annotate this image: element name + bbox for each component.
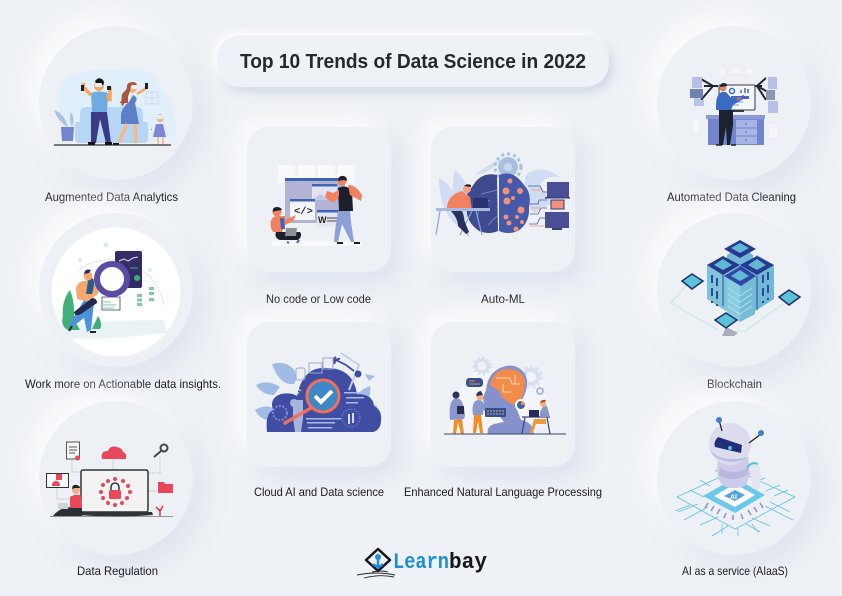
logo: Learnbay [356,548,487,578]
white inner disc [52,228,180,356]
illustration: people building low-code pages [271,165,362,246]
illustration: analyst at data desk [690,68,778,145]
panel: Actionable data insights [25,192,221,391]
logo wordmark: Learn [393,550,449,575]
panel: Augmented Data Analytics [35,21,202,204]
panel: Enhanced Natural Language Processing [404,296,602,499]
panel: Data Regulation [35,380,202,578]
panel: No code or Low code [242,122,402,306]
illustration: head with brain and team [444,358,566,434]
illustration: man with magnifier and dashboard [59,242,167,339]
illustration: laptop with GDPR lock [46,442,173,516]
label: Data Regulation [77,564,158,578]
panel: Automated Data Cleaning [653,21,820,204]
circle [39,401,193,555]
card [247,322,391,467]
card [431,127,575,272]
panel: Cloud AI and Data science [242,296,402,499]
label: Enhanced Natural Language Processing [404,485,602,499]
title text: Top 10 Trends of Data Science in 2022 [240,50,586,73]
label: Cloud AI and Data science [254,485,384,499]
illustration: family with VR headsets [54,68,176,145]
logo wordmark: bay [449,550,487,575]
card [247,127,391,272]
panel: Blockchain [653,192,820,391]
title pill [217,35,609,87]
illustration: robot on AI chip [675,417,795,536]
label: Automated Data Cleaning [667,190,796,204]
logo icon [357,549,395,578]
illustration: cloud with magnifier and check [255,353,381,432]
illustration: robot on AI chip: AI [730,494,737,501]
label: No code or Low code [266,292,371,306]
label: Blockchain [707,377,762,391]
card [431,322,575,467]
circle [657,401,811,555]
circle [39,213,193,367]
panel: AI as a service [653,380,820,578]
illustration: brain with connected computers [436,154,570,236]
illustration: people building low-code pages: W [318,215,327,225]
circle [657,26,811,180]
circle [657,213,811,367]
circle [39,26,193,180]
illustration: people building low-code pages: </> [294,206,313,218]
panel: Auto-ML [426,122,586,306]
label: Auto-ML [481,292,525,306]
illustration: isometric blockchain servers [671,240,800,336]
label: Augmented Data Analytics [45,190,178,204]
label: Work more on Actionable data insights. [25,377,221,391]
label: AI as a service (AIaaS) [682,564,788,578]
